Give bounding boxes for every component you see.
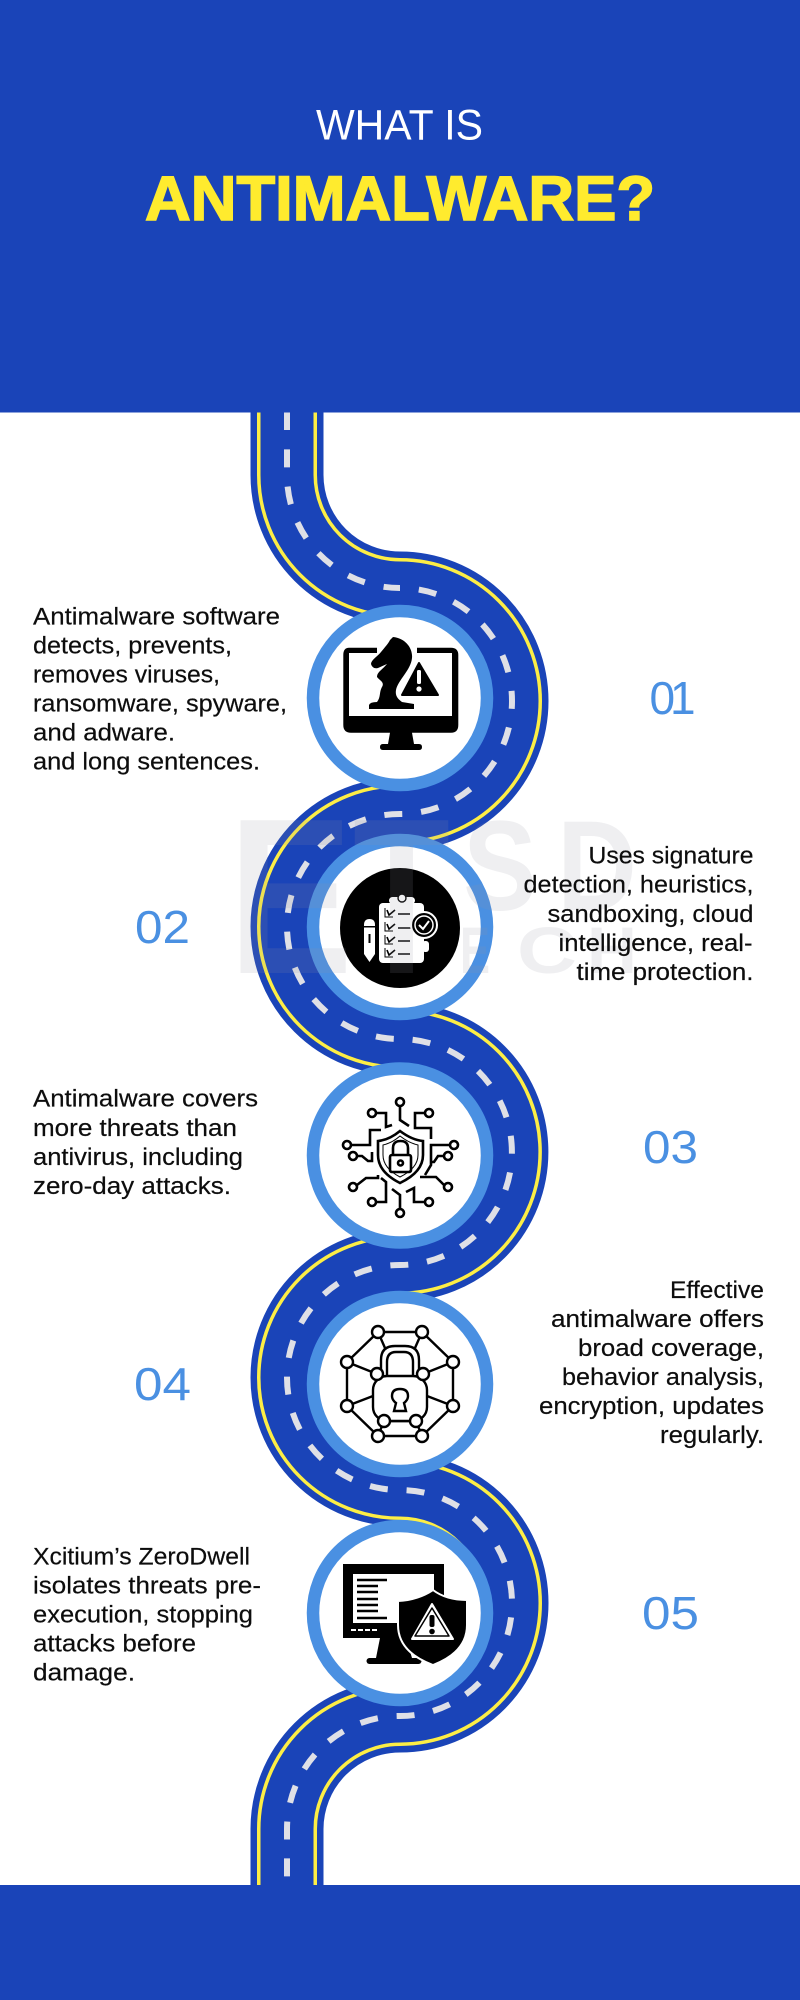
text block: step 3: more threats than bbox=[33, 1115, 237, 1142]
title: antimalware: ANTIMALWARE? bbox=[145, 164, 655, 234]
text block: step 5: execution, stopping bbox=[33, 1602, 253, 1629]
icon: monitor with warning shield bbox=[343, 1564, 467, 1665]
text block: step 1: detects, prevents, bbox=[33, 633, 232, 660]
text block: step 4: regularly. bbox=[660, 1422, 764, 1449]
text block: step 4: Effective bbox=[670, 1277, 764, 1304]
text block: step 1: ransomware, spyware, bbox=[33, 691, 287, 718]
number 04: 04 bbox=[134, 1358, 191, 1410]
winding road bbox=[287, 412, 512, 1886]
watermark logo: E bbox=[460, 913, 490, 987]
watermark logo: S bbox=[463, 795, 537, 938]
footer band bbox=[0, 1885, 800, 2000]
icon: circuit shield with padlock bbox=[343, 1098, 458, 1217]
text block: step 2: time protection. bbox=[576, 959, 754, 986]
number 02: 02 bbox=[135, 901, 190, 953]
text block: step 2: intelligence, real- bbox=[558, 930, 752, 957]
text block: step 1: Antimalware software bbox=[33, 604, 280, 631]
watermark logo: D bbox=[557, 795, 637, 938]
text block: step 2: Uses signature bbox=[588, 843, 754, 870]
text block: step 4: antimalware offers bbox=[551, 1306, 764, 1333]
text block: step 5: damage. bbox=[33, 1660, 135, 1687]
step 3 badge bbox=[313, 1068, 487, 1242]
icon: monitor with knight and warning bbox=[343, 637, 458, 750]
number 01: 01 bbox=[650, 672, 696, 724]
text block: step 3: antivirus, including bbox=[33, 1144, 243, 1171]
text block: step 1: removes viruses, bbox=[33, 662, 220, 689]
title line: what is: WHAT IS bbox=[316, 102, 483, 150]
step 4 badge bbox=[313, 1297, 487, 1471]
header band bbox=[0, 0, 800, 412]
text block: step 5: Xcitium’s ZeroDwell bbox=[33, 1544, 250, 1571]
text block: step 4: broad coverage, bbox=[578, 1335, 764, 1362]
text block: step 5 bbox=[33, 1544, 261, 1687]
watermark logo: E bbox=[228, 773, 353, 1021]
text block: step 2: sandboxing, cloud bbox=[548, 901, 754, 928]
text block: step 3: zero-day attacks. bbox=[33, 1173, 231, 1200]
watermark logo: T bbox=[353, 773, 450, 1021]
text block: step 2 bbox=[524, 843, 754, 986]
watermark logo: C bbox=[517, 913, 577, 987]
watermark logo: H bbox=[587, 913, 637, 987]
text block: step 3: Antimalware covers bbox=[33, 1086, 258, 1113]
icon: checklist clipboard bbox=[340, 868, 460, 988]
text block: step 1: and long sentences. bbox=[33, 749, 260, 776]
watermark logo bbox=[228, 773, 637, 1021]
number 05: 05 bbox=[642, 1587, 699, 1639]
text block: step 4 bbox=[539, 1277, 764, 1449]
step 5 badge bbox=[313, 1526, 487, 1700]
icon: padlock in network bbox=[341, 1326, 459, 1442]
text block: step 5: attacks before bbox=[33, 1631, 196, 1658]
text block: step 3 bbox=[33, 1086, 258, 1200]
text block: step 4: encryption, updates bbox=[539, 1393, 764, 1420]
text block: step 5: isolates threats pre- bbox=[33, 1573, 261, 1600]
text block: step 1 bbox=[33, 604, 287, 776]
text block: step 4: behavior analysis, bbox=[562, 1364, 764, 1391]
step 1 badge bbox=[313, 611, 487, 785]
step 2 badge bbox=[313, 840, 487, 1014]
text block: step 1: and adware. bbox=[33, 720, 175, 747]
number 03: 03 bbox=[643, 1121, 698, 1173]
text block: step 2: detection, heuristics, bbox=[524, 872, 754, 899]
